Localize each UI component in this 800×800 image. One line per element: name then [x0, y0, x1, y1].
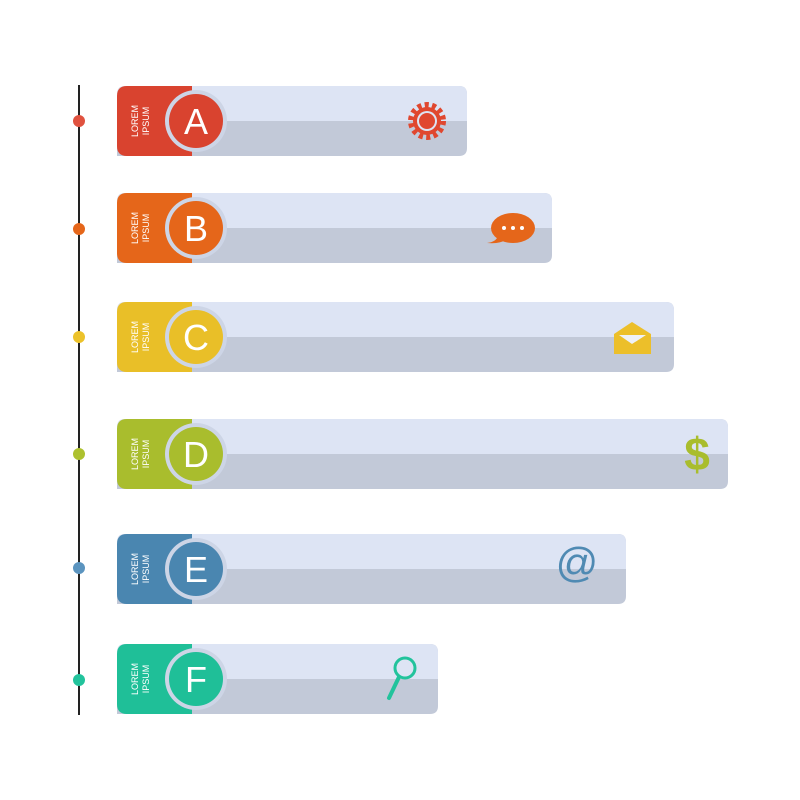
row E: LOREM: [130, 553, 140, 585]
timeline: [73, 85, 85, 715]
icon: magnifier: [389, 658, 415, 698]
icon: gear: [411, 105, 443, 137]
row B: LOREM: [130, 212, 140, 244]
row D: LOREM: [130, 438, 140, 470]
row F: LOREM: [130, 663, 140, 695]
row D: D: [183, 434, 209, 475]
row B: [117, 193, 552, 263]
row E: [117, 534, 626, 604]
row D: [117, 419, 728, 489]
icon: dollar: $: [684, 428, 710, 480]
icon: speech bubble: [487, 213, 535, 243]
row A: A: [184, 101, 208, 142]
row F: IPSUM: [141, 665, 151, 693]
row D: IPSUM: [141, 440, 151, 468]
icon: at sign: @: [556, 539, 598, 586]
row F: [117, 644, 438, 714]
row A: IPSUM: [141, 107, 151, 135]
row A: [117, 86, 467, 156]
row C: LOREM: [130, 321, 140, 353]
icon: envelope: [614, 322, 651, 354]
row F: F: [185, 659, 207, 700]
row E: IPSUM: [141, 555, 151, 583]
row B: IPSUM: [141, 214, 151, 242]
row A: LOREM: [130, 105, 140, 137]
row C: IPSUM: [141, 323, 151, 351]
row C: [117, 302, 674, 372]
row B: B: [184, 208, 208, 249]
row C: C: [183, 317, 209, 358]
row E: E: [184, 549, 208, 590]
